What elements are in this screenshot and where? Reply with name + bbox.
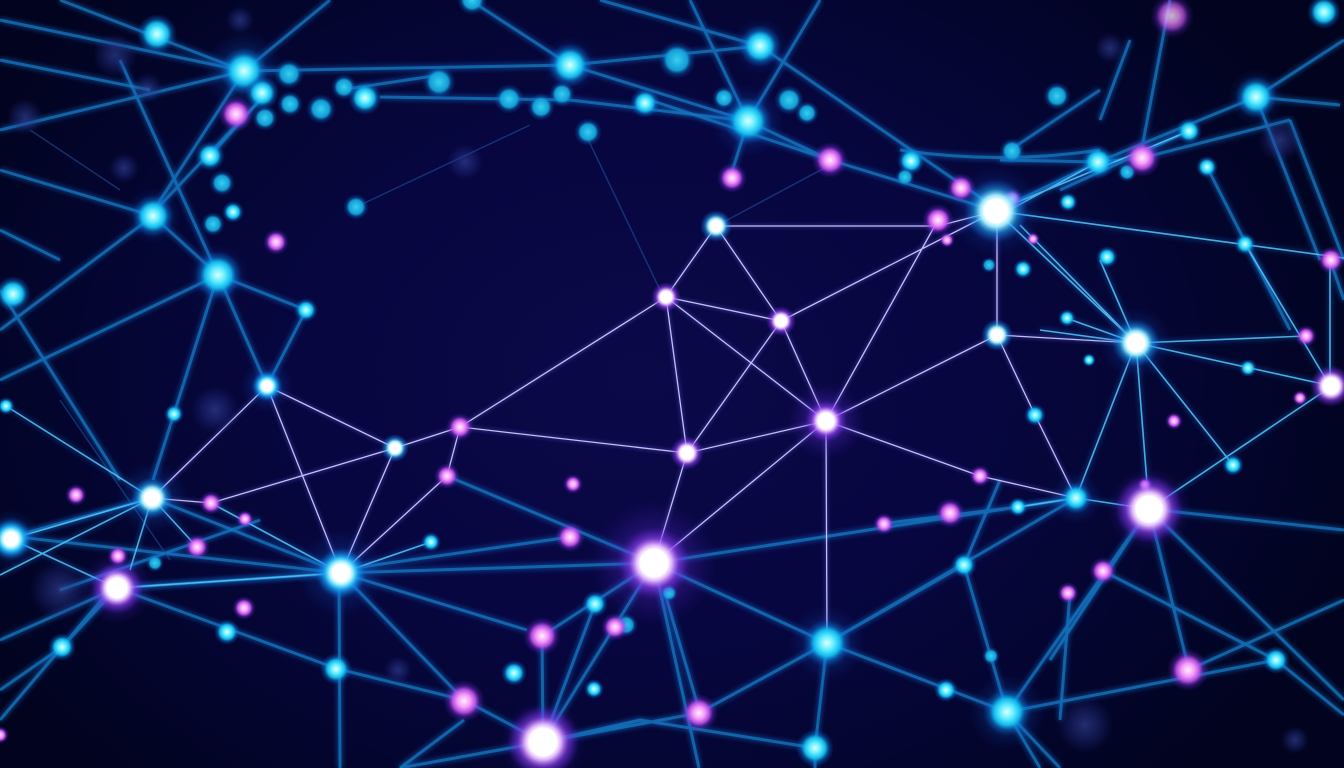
faint mid-field links [30, 125, 830, 560]
bright white-core nodes [0, 179, 1344, 768]
bright central links [152, 211, 1136, 643]
blue right-hand links [0, 131, 1344, 588]
